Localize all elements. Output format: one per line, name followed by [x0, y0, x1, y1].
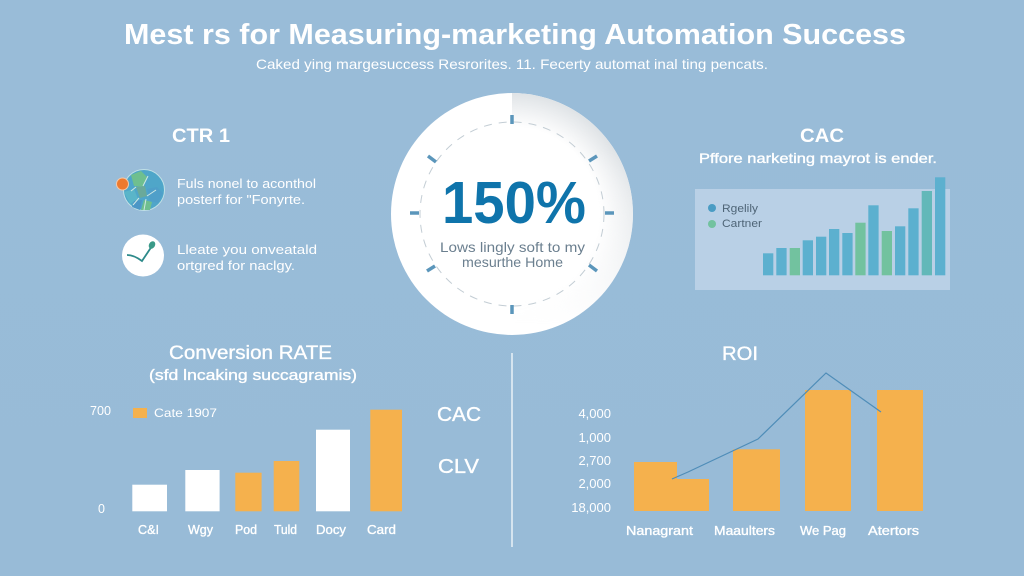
heading: CTR: CTR 1: [172, 126, 230, 147]
x axis labels: [626, 524, 919, 538]
gauge shaded rim: [512, 93, 633, 280]
legend: [708, 203, 762, 230]
y axis labels: [571, 406, 611, 515]
x axis labels: [138, 523, 396, 537]
label: CLV: CLV: [438, 456, 480, 478]
panel: CAC: [695, 126, 950, 290]
y axis labels: 2,700: [578, 453, 611, 468]
y axis labels: 4,000: [578, 406, 611, 421]
x axis labels: We Pag: [800, 524, 846, 538]
big number: 150%: [442, 170, 586, 236]
legend: Cartner: [722, 218, 762, 230]
bar chart: [132, 410, 402, 511]
gauge caption line 2: mesurthe Home: [462, 254, 563, 270]
label: CAC: CAC: [437, 404, 481, 426]
gauge tick marks: [410, 115, 614, 314]
y axis labels: 1,000: [578, 430, 611, 445]
text: second CTR note: posterf for "Fonyrte.: [177, 192, 305, 207]
panel: central gauge: [391, 93, 633, 335]
y axis labels: [90, 404, 111, 516]
x axis labels: Card: [367, 523, 396, 537]
icon: check trend badge: [122, 234, 164, 276]
gauge caption line 1: Lows lingly soft to my: [440, 239, 585, 255]
heading: CAC: CAC: [800, 126, 844, 147]
panel: conversion rate: [90, 343, 481, 537]
subtitle: Caked ying margesuccess Resrorites. 11. Fecerty automat inal ting pencats.: [256, 56, 768, 72]
heading: ROI: ROI: [722, 344, 758, 365]
y axis labels: 0: [98, 502, 105, 516]
CAC subtitle: Pffore narketing mayrot is ender.: [699, 150, 937, 166]
y axis labels: 700: [90, 404, 111, 418]
legend: [133, 406, 217, 420]
bar chart: [634, 390, 923, 511]
heading: conversion rate: Conversion RATE: [169, 343, 332, 364]
x axis labels: Tuld: [274, 523, 297, 537]
chart background: [695, 189, 950, 290]
text: third CTR note: Lleate you onveatald: [177, 242, 317, 257]
panel: CTR: [116, 126, 317, 276]
text: first CTR note: Fuls nonel to aconthol: [177, 176, 316, 191]
legend: Cate 1907: [154, 406, 217, 420]
x axis labels: Wgy: [188, 523, 214, 537]
y axis labels: 18,000: [571, 500, 611, 515]
x axis labels: Docy: [316, 523, 347, 537]
text: fourth CTR note: ortgred for naclgy.: [177, 258, 295, 273]
panel: ROI: [571, 344, 923, 538]
legend: Rgelily: [722, 203, 759, 215]
gauge disc: [391, 93, 633, 335]
x axis labels: Atertors: [868, 524, 919, 538]
y axis labels: 2,000: [578, 476, 611, 491]
x axis labels: C&I: [138, 523, 159, 537]
bar chart: [763, 177, 945, 275]
icon: globe with orange dot: [116, 170, 164, 210]
title: Mest rs for Measuring-marketing Automation Success: [124, 19, 906, 51]
x axis labels: Nanagrant: [626, 524, 694, 538]
x axis labels: Pod: [235, 523, 257, 537]
trend line: [672, 373, 881, 479]
x axis labels: Maaulters: [714, 524, 775, 538]
gauge dashed ring: [420, 122, 604, 306]
conversion subtitle: (sfd lncaking succagramis): [149, 367, 357, 384]
